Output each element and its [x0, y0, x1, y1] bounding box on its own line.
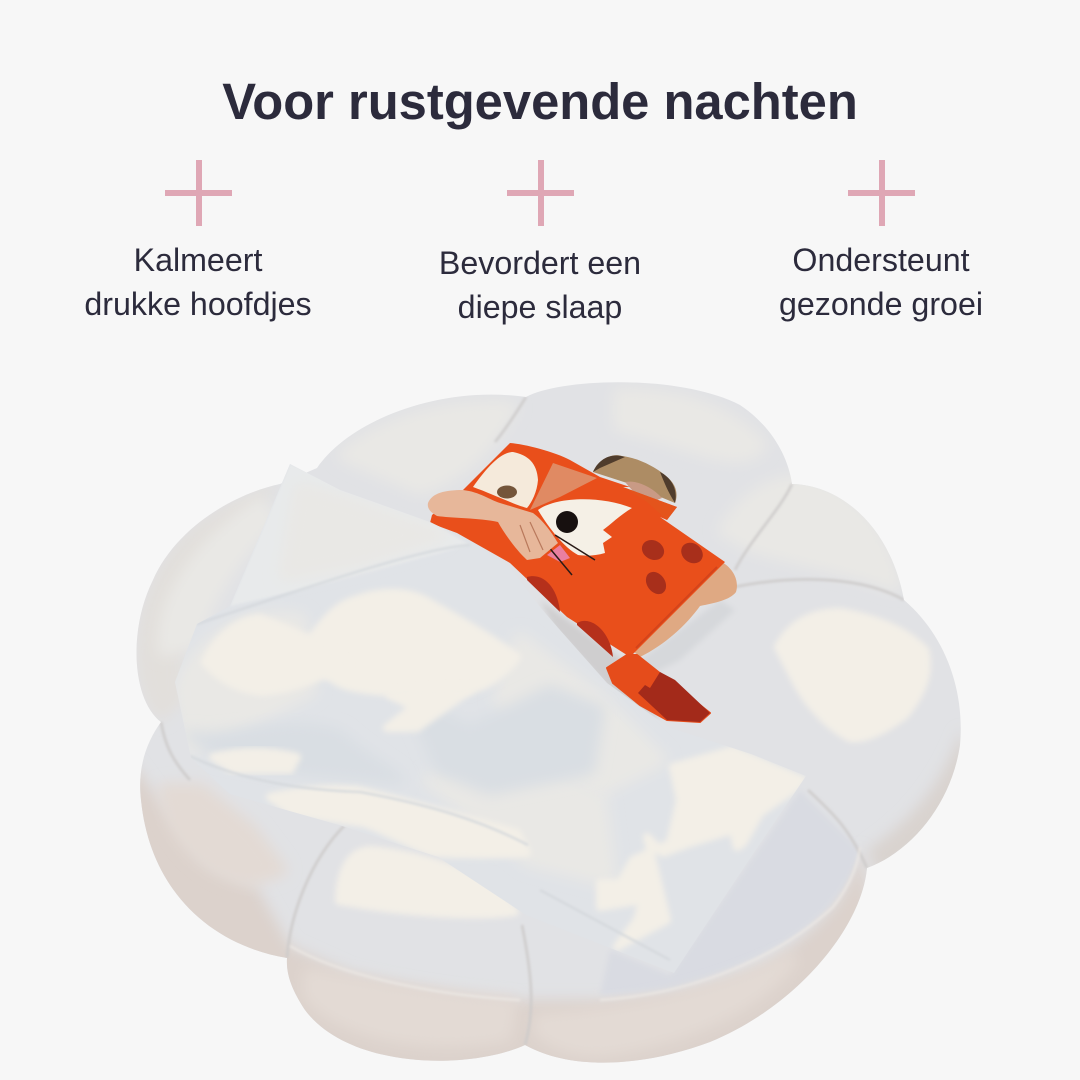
blanket fold lines: [192, 544, 639, 944]
blanket soft body tone: [183, 620, 296, 724]
icon: plus 1: [165, 160, 232, 227]
child's arm and hand: [428, 490, 558, 560]
warm underside bands: [140, 772, 866, 1063]
text: benefit 2: Bevordert een: [439, 245, 641, 281]
fox right eye: [538, 499, 632, 556]
text: benefit 2: [439, 245, 641, 325]
fox tongue and whiskers: [547, 545, 570, 562]
blanket top sheet: [430, 522, 438, 526]
title: Voor rustgevende nachten: [222, 73, 858, 130]
blanket lit patches: [303, 593, 517, 693]
text: benefit 1: drukke hoofdjes: [84, 286, 312, 322]
text: benefit 3: [779, 242, 983, 322]
fox tail: [607, 655, 710, 722]
illustration: child on flower-shaped floor cushion: [136, 382, 961, 1063]
lobe seams: [161, 397, 904, 1045]
child's foot and leg: [620, 562, 737, 657]
lit patches on lobes: [778, 612, 927, 738]
lower lobes body: [600, 790, 860, 995]
blanket shadows: [410, 690, 600, 790]
text: benefit 3: Ondersteunt: [792, 242, 970, 278]
text: benefit 3: gezonde groei: [779, 286, 983, 322]
fox pillow: [430, 443, 725, 722]
fox nose pattern: [530, 463, 597, 510]
icon: plus 2: [507, 160, 574, 227]
hair: [593, 455, 677, 505]
text: benefit 1: Kalmeert: [134, 242, 262, 278]
shadow gap by pillow: [543, 604, 656, 716]
text: benefit 1: [84, 242, 312, 322]
text: benefit 2: diepe slaap: [458, 289, 622, 325]
flower cushion: [120, 382, 980, 1080]
fox left eye: [473, 452, 538, 508]
icon: plus 3: [848, 160, 915, 227]
blanket: [175, 464, 806, 973]
